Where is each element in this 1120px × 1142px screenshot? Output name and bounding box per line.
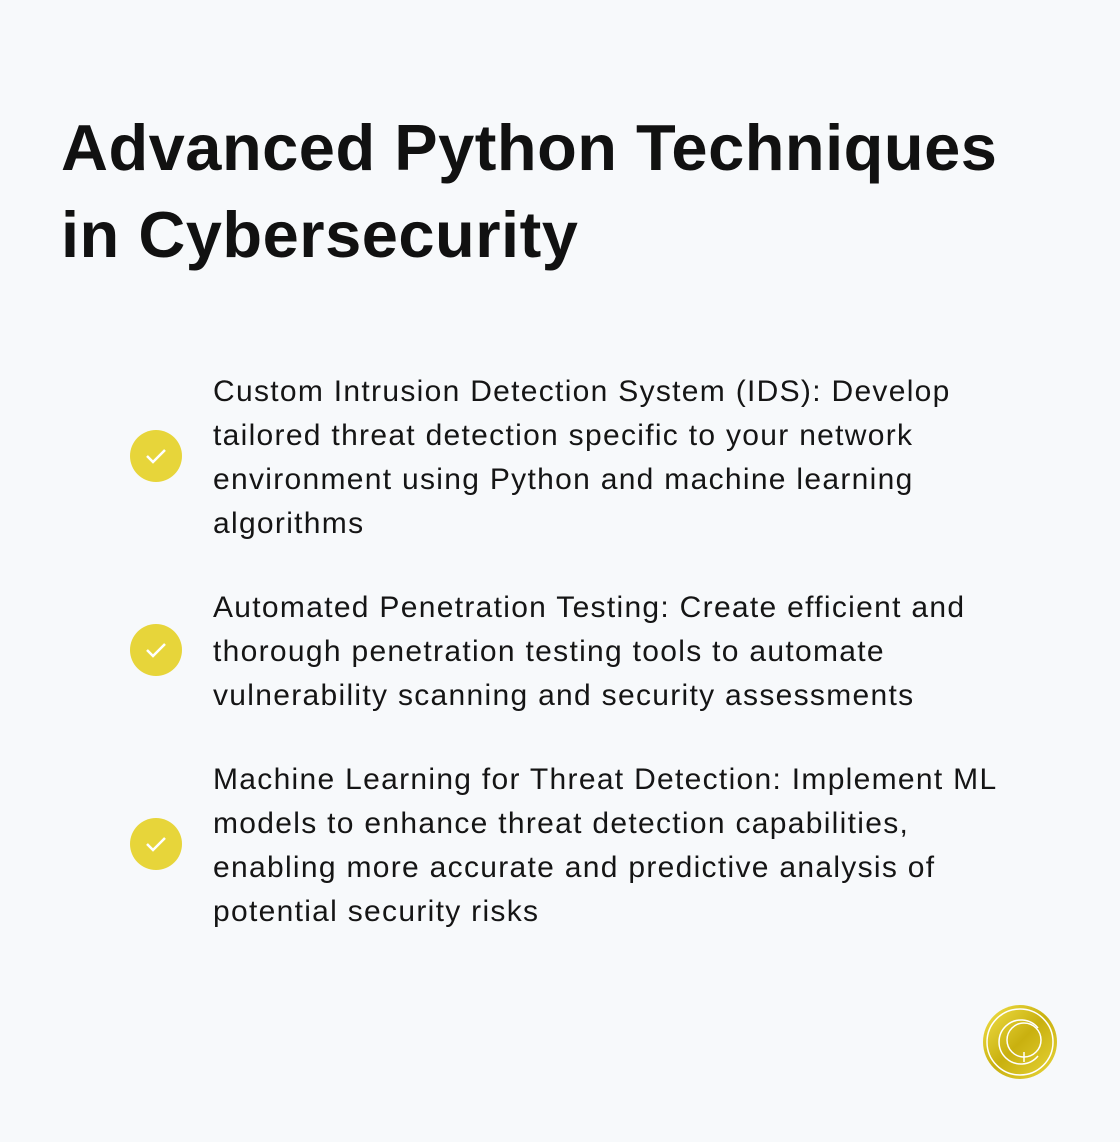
- text: enabling more accurate and predictive analysis of: [213, 851, 935, 884]
- icon: check: [130, 624, 182, 676]
- text: Custom Intrusion Detection System (IDS): Develop: [213, 375, 951, 408]
- text: models to enhance threat detection capabilities,: [213, 807, 909, 840]
- text: Machine Learning for Threat Detection: Implement ML: [213, 763, 997, 796]
- text: vulnerability scanning and security assessments: [213, 679, 914, 712]
- item: IDS: [130, 375, 951, 540]
- title: in Cybersecurity: [61, 198, 578, 271]
- item: ML: [130, 763, 997, 928]
- text: potential security risks: [213, 895, 539, 928]
- title: Advanced Python Techniques: [61, 111, 997, 184]
- item: pentest: [130, 591, 965, 712]
- text: [213, 375, 951, 540]
- text: tailored threat detection specific to your network: [213, 419, 913, 452]
- text: Automated Penetration Testing: Create efficient and: [213, 591, 965, 624]
- text: [213, 591, 965, 712]
- text: algorithms: [213, 507, 364, 540]
- icon: check: [130, 818, 182, 870]
- logo: [983, 1005, 1057, 1079]
- icon: check: [130, 430, 182, 482]
- title: [61, 111, 997, 271]
- text: environment using Python and machine learning: [213, 463, 914, 496]
- text: [213, 763, 997, 928]
- text: thorough penetration testing tools to automate: [213, 635, 885, 668]
